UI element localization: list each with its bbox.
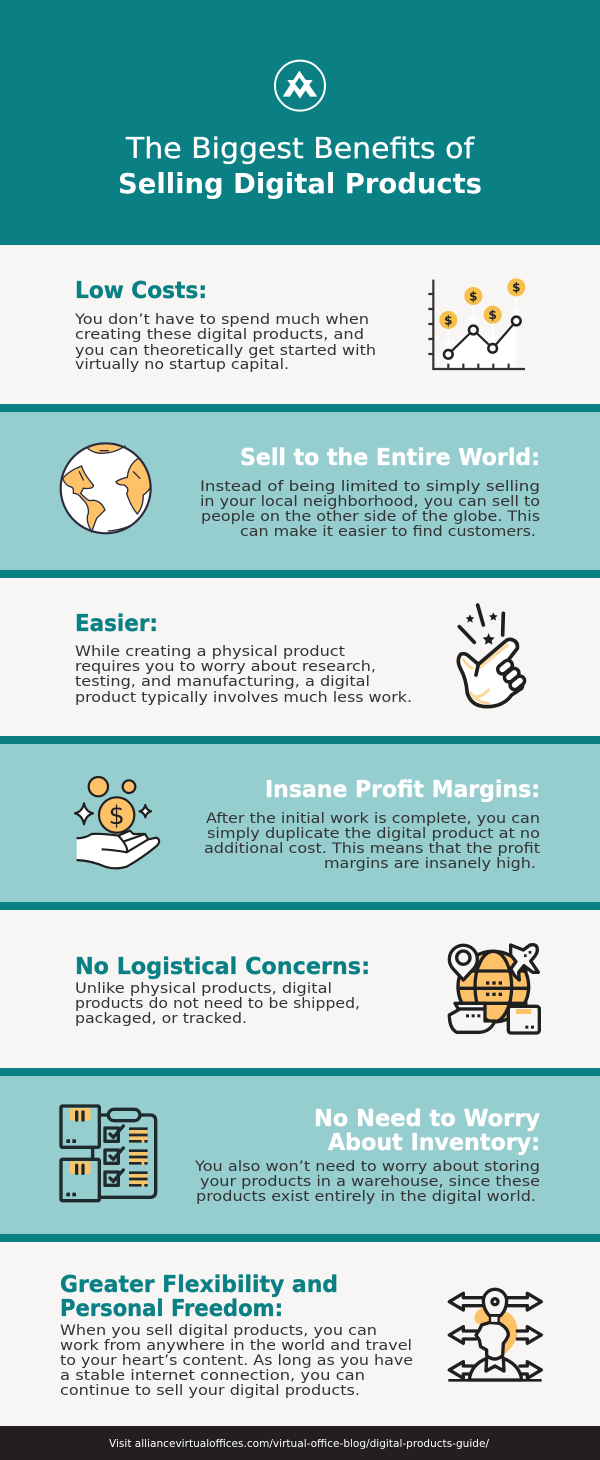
text: flexibility and freedom: work from anywhere in the world and travel	[60, 1338, 412, 1354]
text: no logistical concerns: products do not need to be shipped,	[75, 996, 360, 1012]
text: sell to the entire world: in your local neighborhood, you can sell to	[200, 494, 540, 510]
text: low costs	[74, 312, 376, 373]
text: inventory	[194, 1159, 540, 1205]
text: inventory: You also won’t need to worry about storing	[194, 1159, 540, 1175]
text: no logistical concerns: Unlike physical products, digital	[75, 981, 332, 997]
panel: easier	[0, 578, 600, 736]
icon: rising chart with coins	[428, 278, 525, 369]
icon: globe	[61, 443, 151, 533]
panel: sell to the entire world	[0, 412, 600, 570]
divider strip	[0, 570, 600, 578]
text: sell to the entire world: Instead of being limited to simply selling	[200, 479, 540, 495]
title	[118, 132, 482, 200]
panel: low costs	[0, 245, 600, 404]
text: sell to the entire world: people on the other side of the globe. This	[201, 509, 540, 525]
divider strip	[0, 902, 600, 910]
panel: flexibility and freedom	[0, 1242, 600, 1426]
text: inventory: products exist entirely in the digital world.	[196, 1189, 536, 1205]
text: no logistical concerns: packaged, or tracked.	[75, 1011, 247, 1027]
text: low costs: you can theoretically get started with	[75, 343, 376, 359]
text: flexibility and freedom: a stable internet connection, you can	[60, 1368, 365, 1384]
icon: logo	[275, 61, 325, 111]
heading: insane profit margins: Insane Profit Margins:	[265, 775, 540, 803]
text: flexibility and freedom: When you sell digital products, you can	[60, 1323, 377, 1339]
text: no logistical concerns	[75, 981, 360, 1027]
heading: sell to the entire world: Sell to the Entire World:	[240, 443, 540, 471]
divider strip	[0, 1234, 600, 1242]
panel: no need to worry about inventory	[0, 1076, 600, 1234]
text: low costs: You don’t have to spend much when	[74, 312, 369, 328]
text: easier: testing, and manufacturing, a digital	[75, 674, 370, 690]
text: insane profit margins	[204, 811, 540, 872]
text: inventory: your products in a warehouse, since these	[200, 1174, 540, 1190]
icon: snapping fingers	[458, 605, 523, 707]
icon: hand with coins: $	[109, 800, 125, 830]
icon: inventory checklist	[61, 1106, 156, 1201]
text: low costs: virtually no startup capital.	[75, 357, 289, 373]
heading: flexibility and freedom: Greater Flexibility and	[60, 1270, 338, 1298]
divider strip	[0, 736, 600, 744]
text: sell to the entire world	[200, 479, 540, 540]
title: Selling Digital Products	[118, 167, 482, 200]
icon: idea and directions	[448, 1289, 542, 1380]
footer link text: Visit alliancevirtualoffices.com/virtual-office-blog/digital-products-guide/	[109, 1438, 489, 1450]
text: easier	[75, 644, 412, 706]
icon: hand with coins	[75, 777, 159, 868]
icon: rising chart with coins: $	[488, 308, 497, 322]
icon: rising chart with coins: $	[444, 313, 453, 327]
heading: low costs: Low Costs:	[75, 276, 207, 304]
heading: no logistical concerns: No Logistical Concerns:	[75, 952, 370, 980]
heading: inventory	[314, 1104, 540, 1156]
text: insane profit margins: additional cost. This means that the profit	[204, 841, 540, 857]
heading: flexibility and freedom	[60, 1270, 338, 1322]
text: easier: While creating a physical product	[75, 644, 345, 660]
text: insane profit margins: margins are insanely high.	[324, 856, 536, 872]
title: The Biggest Benefits of	[125, 132, 475, 165]
text: sell to the entire world: can make it easier to find customers.	[240, 524, 536, 540]
text: flexibility and freedom: continue to sell your digital products.	[60, 1383, 360, 1399]
text: easier: product typically involves much less work.	[75, 690, 412, 706]
panel: no logistical concerns	[0, 910, 600, 1068]
text: easier: requires you to worry about research,	[75, 659, 376, 675]
panel: insane profit margins	[0, 744, 600, 902]
text: insane profit margins: After the initial work is complete, you can	[206, 811, 540, 827]
divider strip	[0, 404, 600, 412]
icon: rising chart with coins: $	[512, 281, 520, 295]
heading: inventory: About Inventory:	[328, 1128, 540, 1156]
heading: easier: Easier:	[75, 609, 158, 637]
text: insane profit margins: simply duplicate the digital product at no	[207, 826, 540, 842]
heading: inventory: No Need to Worry	[314, 1104, 540, 1132]
heading: flexibility and freedom: Personal Freedom:	[60, 1294, 283, 1322]
divider strip	[0, 1068, 600, 1076]
footer	[0, 1426, 600, 1460]
header banner	[0, 0, 600, 245]
text: low costs: creating these digital products, and	[75, 327, 364, 343]
icon: global logistics	[449, 945, 539, 1033]
text: flexibility and freedom: to your heart’s content. As long as you have	[60, 1353, 413, 1369]
icon: rising chart with coins: $	[469, 289, 477, 303]
text: flexibility and freedom	[60, 1323, 413, 1399]
